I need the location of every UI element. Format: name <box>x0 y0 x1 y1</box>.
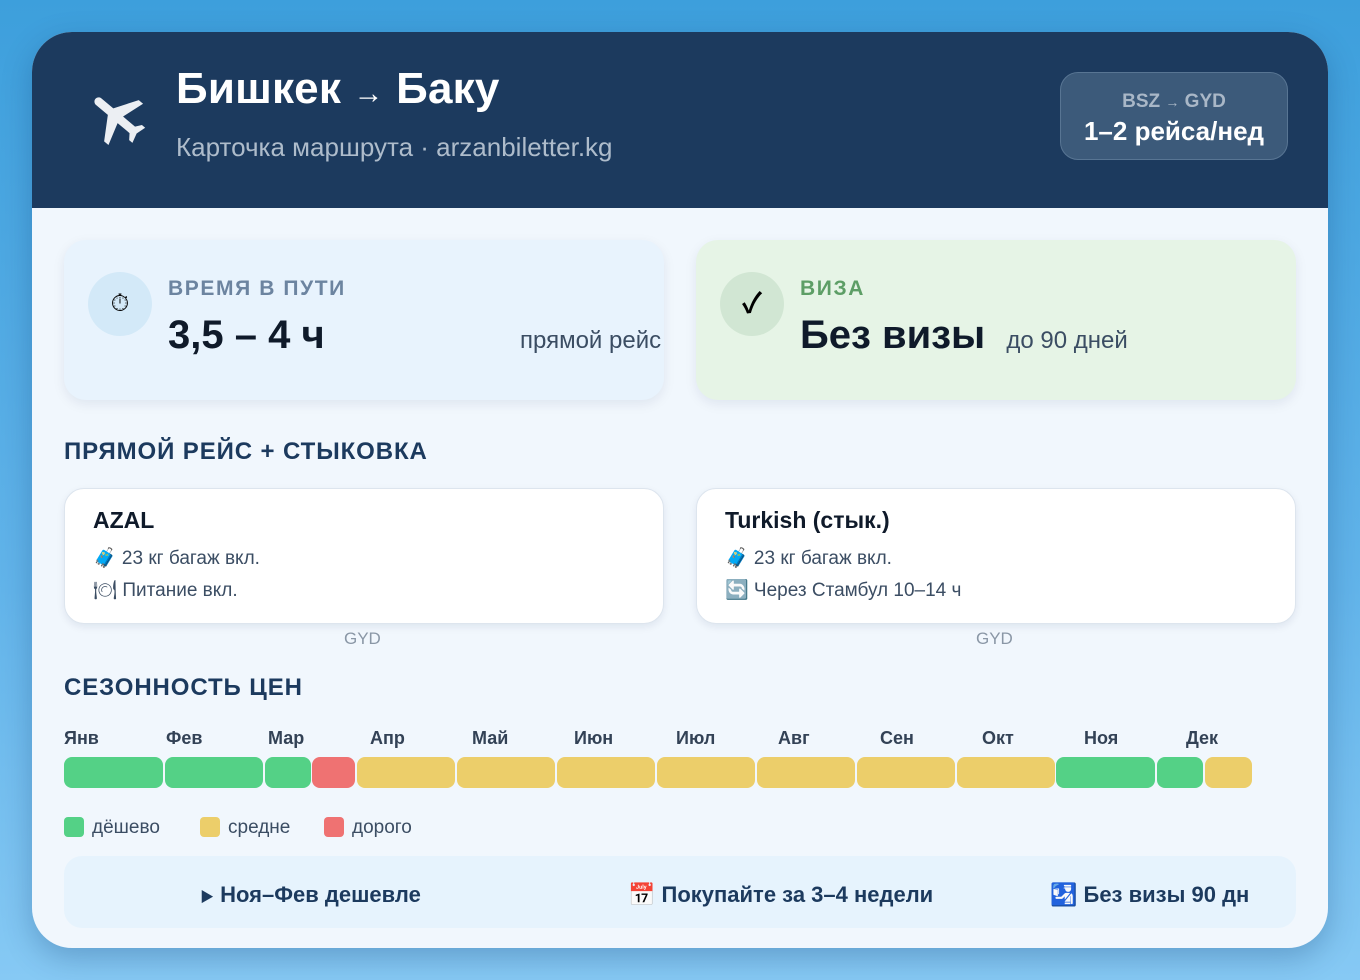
chart: season bars <box>64 728 1252 788</box>
panel: Turkish: 🔄 Через Стамбул 10–14 ч <box>725 580 961 601</box>
legend: дорого <box>352 817 412 838</box>
chart: season bars: Апр <box>370 728 405 748</box>
chart: season bars: Мар <box>268 728 304 748</box>
tips bar: 🛂 Без визы 90 дн <box>1050 882 1249 907</box>
value: Без визы до 90 дней <box>800 313 1128 357</box>
icon: stopwatch: ⏱ <box>111 290 129 317</box>
chart: season bars: Авг <box>778 728 810 748</box>
code: GYD: GYD <box>976 629 1013 648</box>
chart: season bars: Ноя <box>1084 728 1118 748</box>
heading: seasonality: СЕЗОННОСТЬ ЦЕН <box>64 674 303 701</box>
header <box>32 32 1328 208</box>
chart: season bars: Окт <box>982 728 1014 748</box>
tips bar: 📅 Покупайте за 3–4 недели <box>628 882 933 907</box>
panel: AZAL <box>64 488 664 624</box>
tips bar <box>64 856 1296 928</box>
badge: frequency <box>1060 72 1288 160</box>
panel: AZAL: 🧳 23 кг багаж вкл. <box>93 548 260 569</box>
title: Бишкек → Баку <box>176 64 500 113</box>
panel: AZAL: 🍽 Питание вкл. <box>93 580 238 601</box>
panel: visa <box>696 240 1296 400</box>
code: GYD: GYD <box>344 629 381 648</box>
chart: season bars: Май <box>472 728 508 748</box>
panel: travel time <box>64 240 664 400</box>
panel: AZAL: AZAL <box>93 507 154 533</box>
chart: season bars: Сен <box>880 728 914 748</box>
legend <box>64 817 412 838</box>
icon: check: ✓ <box>742 288 762 319</box>
icon: check <box>720 272 784 336</box>
chart: season bars: Янв <box>64 728 99 748</box>
badge: frequency: 1–2 рейса/нед <box>1084 116 1264 146</box>
badge: frequency: BSZ → GYD <box>1122 91 1226 112</box>
heading: airlines: ПРЯМОЙ РЕЙС + СТЫКОВКА <box>64 438 428 465</box>
chart: season bars: Фев <box>166 728 202 748</box>
chart: season bars: Июн <box>574 728 613 748</box>
label: ВРЕМЯ В ПУТИ <box>168 277 346 300</box>
chart: season bars: Дек <box>1186 728 1218 748</box>
value: 3,5 – 4 ч <box>168 313 325 357</box>
chart: season bars: Июл <box>676 728 715 748</box>
icon: stopwatch <box>88 272 152 336</box>
panel: Turkish <box>696 488 1296 624</box>
tips bar: ▶ Ноя–Фев дешевле <box>200 882 421 907</box>
subtitle: Карточка маршрута · arzanbiletter.kg <box>176 132 613 162</box>
note: прямой рейс <box>520 327 661 354</box>
legend: дёшево <box>92 817 160 838</box>
label: ВИЗА <box>800 277 865 300</box>
legend: средне <box>228 817 290 838</box>
icon: airplane <box>94 97 146 145</box>
panel: Turkish: 🧳 23 кг багаж вкл. <box>725 548 892 569</box>
panel: Turkish: Turkish (стык.) <box>725 507 890 533</box>
